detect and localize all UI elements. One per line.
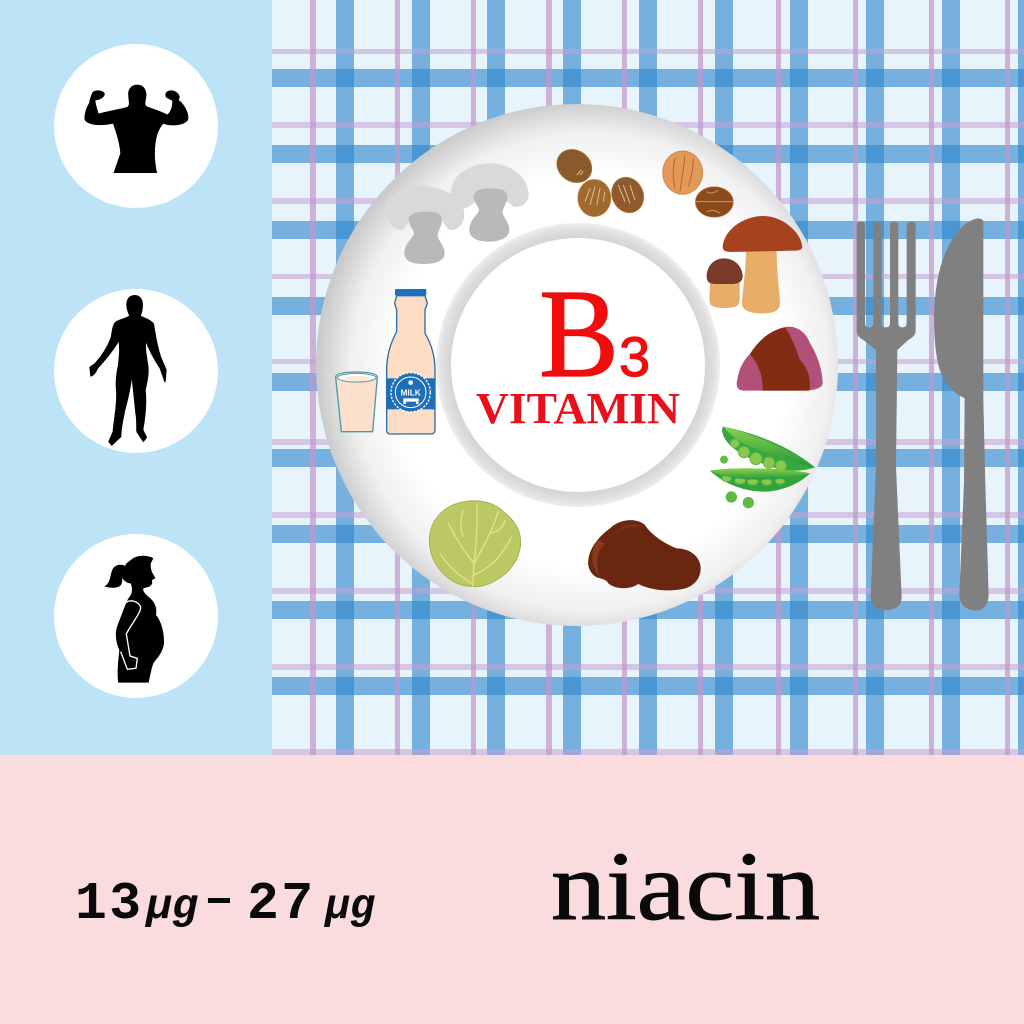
heading: VITAMIN: VITAMIN — [476, 384, 680, 433]
plate — [316, 104, 838, 626]
food: milk bottle: MILK — [400, 387, 421, 397]
heading: B3: 3 — [619, 325, 650, 388]
food: pea pods — [710, 427, 815, 508]
dosage text: 13 — [75, 874, 141, 934]
food: almond and walnut — [663, 151, 733, 217]
food: hazelnuts — [550, 143, 650, 218]
icon: bodybuilder in white circle — [54, 44, 218, 208]
left blue panel — [0, 0, 272, 755]
icon: knife — [934, 218, 989, 611]
icon: fork — [857, 222, 916, 610]
food: white mushrooms — [386, 163, 529, 264]
icon: pregnant woman in white circle — [54, 534, 218, 698]
plate inner ring — [436, 223, 720, 507]
heading: B3: B — [539, 265, 619, 404]
food: cabbage — [429, 501, 521, 587]
food: porcini mushrooms — [707, 216, 802, 313]
food: milk glass — [336, 372, 377, 432]
dosage text — [75, 872, 375, 934]
food: milk bottle — [386, 289, 435, 434]
dosage text: – — [204, 872, 234, 929]
icon: standing human in white circle — [54, 289, 218, 453]
dosage text: μg — [144, 882, 198, 931]
plaid tablecloth — [272, 0, 1024, 755]
food: meat — [737, 327, 823, 391]
vitamin name: niacin: niacin — [551, 833, 820, 940]
dosage text: 27 — [247, 874, 313, 934]
bottom pink panel — [0, 755, 1024, 1024]
food: liver — [588, 520, 701, 590]
dosage text: μg — [323, 882, 375, 931]
